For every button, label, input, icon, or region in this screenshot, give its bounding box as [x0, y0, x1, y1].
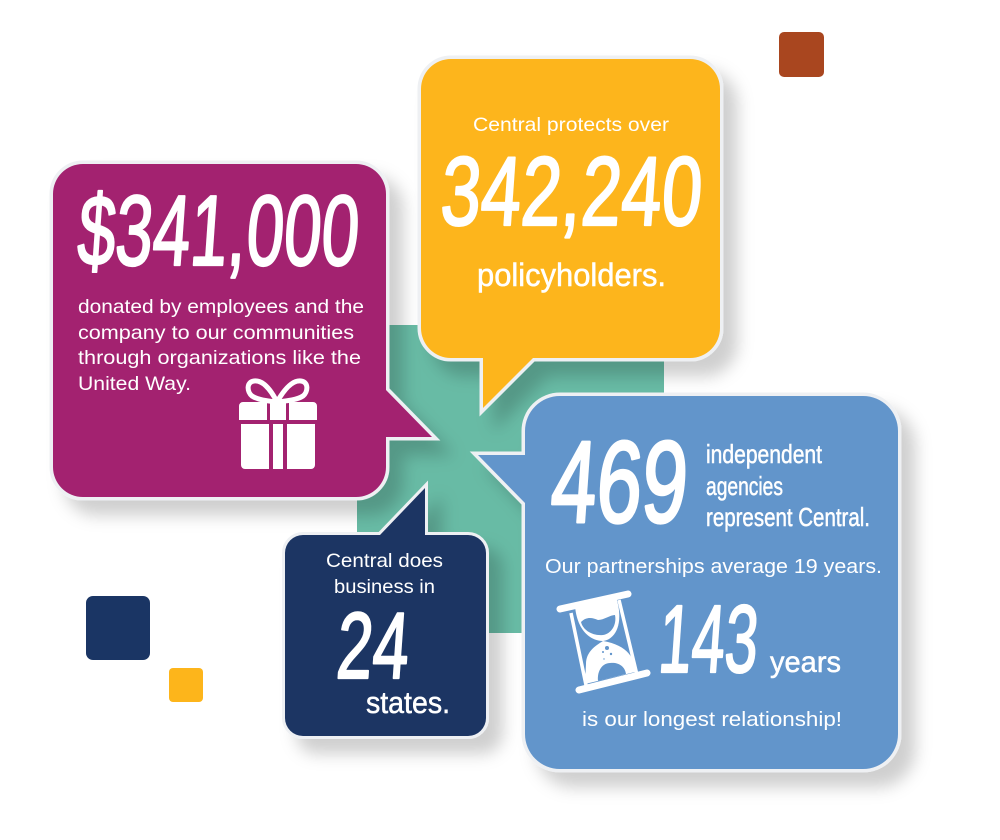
agencies label: independent	[706, 439, 823, 469]
donation description: through organizations like the	[78, 347, 361, 369]
decorative square: yellow	[169, 668, 203, 702]
donation description: donated by employees and the	[78, 296, 364, 318]
panel: donations speech bubble	[53, 164, 432, 497]
central teal square	[357, 325, 664, 633]
policyholders label: policyholders.	[477, 257, 666, 293]
big number: 342,240: 342,240	[438, 136, 706, 246]
states label: states.	[366, 685, 450, 720]
big number: 143: 143	[656, 586, 762, 693]
intro text: business in	[334, 576, 435, 598]
years label: years	[770, 646, 841, 679]
big number: $341,000: $341,000	[74, 175, 363, 287]
icon: gift box	[239, 381, 317, 469]
panel: policyholders speech bubble	[421, 59, 720, 408]
intro text	[326, 550, 443, 598]
donation description: company to our communities	[78, 322, 354, 344]
intro text: Central protects over	[473, 114, 670, 136]
bubble shape: purple	[53, 164, 432, 497]
big number: 469: 469	[547, 417, 692, 547]
donation description: United Way.	[78, 373, 191, 395]
agencies label: represent Central.	[706, 502, 870, 532]
agencies label: agencies	[706, 471, 783, 501]
bubble shape: navy	[285, 488, 486, 736]
longest relationship text: is our longest relationship!	[582, 708, 842, 731]
bubble shape: blue	[478, 396, 898, 769]
intro text: Central does	[326, 550, 443, 572]
partnership average text: Our partnerships average 19 years.	[545, 555, 882, 578]
icon: hourglass	[560, 594, 647, 690]
panel: agencies speech bubble	[478, 396, 898, 769]
decorative square: rust	[779, 32, 824, 77]
bubble shape: yellow	[421, 59, 720, 408]
agencies label	[706, 439, 870, 532]
big number: 24: 24	[334, 593, 413, 698]
decorative square: navy	[86, 596, 150, 660]
donation description	[78, 296, 364, 395]
panel: states speech bubble	[285, 488, 486, 736]
